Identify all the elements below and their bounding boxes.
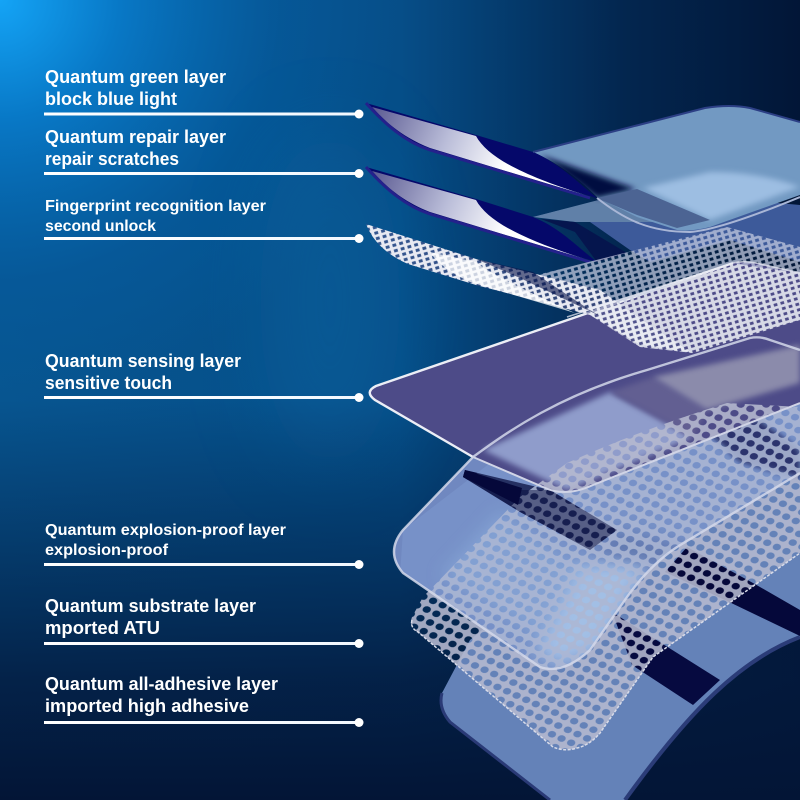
layer: quantum sensing <box>370 262 800 492</box>
label: fingerprint recognition layer: second unlock <box>45 218 156 235</box>
label: quantum substrate layer: mported ATU <box>45 618 160 638</box>
band: lower right dark band <box>665 547 800 636</box>
band overlay: dark band seen through glass <box>463 470 617 550</box>
label: quantum explosion-proof layer <box>44 522 364 569</box>
layer: quantum repair <box>366 167 800 262</box>
layer: quantum explosion-proof glass <box>394 404 800 668</box>
label: quantum green layer <box>44 67 364 118</box>
layer: quantum all-adhesive <box>441 470 800 800</box>
label: quantum explosion-proof layer: explosion-proof <box>45 542 169 559</box>
band: upper dark band <box>463 470 617 550</box>
glass tint over mesh <box>400 400 800 670</box>
label: quantum substrate layer <box>44 596 364 648</box>
label: quantum sensing layer: Quantum sensing layer <box>45 351 241 371</box>
outline: explosion-proof glass edge <box>394 337 800 669</box>
label: quantum green layer: Quantum green layer <box>45 67 226 87</box>
label: quantum all-adhesive layer <box>44 674 364 727</box>
label: fingerprint recognition layer: Fingerprint recognition layer <box>45 198 266 215</box>
label: quantum repair layer: repair scratches <box>45 149 179 169</box>
label: quantum all-adhesive layer: imported high adhesive <box>45 696 249 716</box>
layer: quantum substrate mesh <box>411 403 800 750</box>
band overlay: solid band start <box>463 470 522 505</box>
layer: fingerprint recognition mesh <box>366 224 800 353</box>
band: upper right dark band <box>700 420 800 478</box>
outline: sensing layer lower edge <box>473 403 800 492</box>
label: quantum sensing layer: sensitive touch <box>45 373 172 393</box>
label: quantum green layer: block blue light <box>45 89 177 109</box>
label: quantum substrate layer: Quantum substrate layer <box>45 596 256 616</box>
band: second dark band <box>612 612 720 705</box>
label: fingerprint recognition layer <box>44 198 364 243</box>
label: quantum sensing layer <box>44 351 364 402</box>
label: quantum repair layer: Quantum repair layer <box>45 127 226 147</box>
layer: quantum green <box>366 103 800 232</box>
label: quantum all-adhesive layer: Quantum all-adhesive layer <box>45 674 278 694</box>
label: quantum explosion-proof layer: Quantum explosion-proof layer <box>45 522 286 539</box>
label: quantum repair layer <box>44 127 364 178</box>
